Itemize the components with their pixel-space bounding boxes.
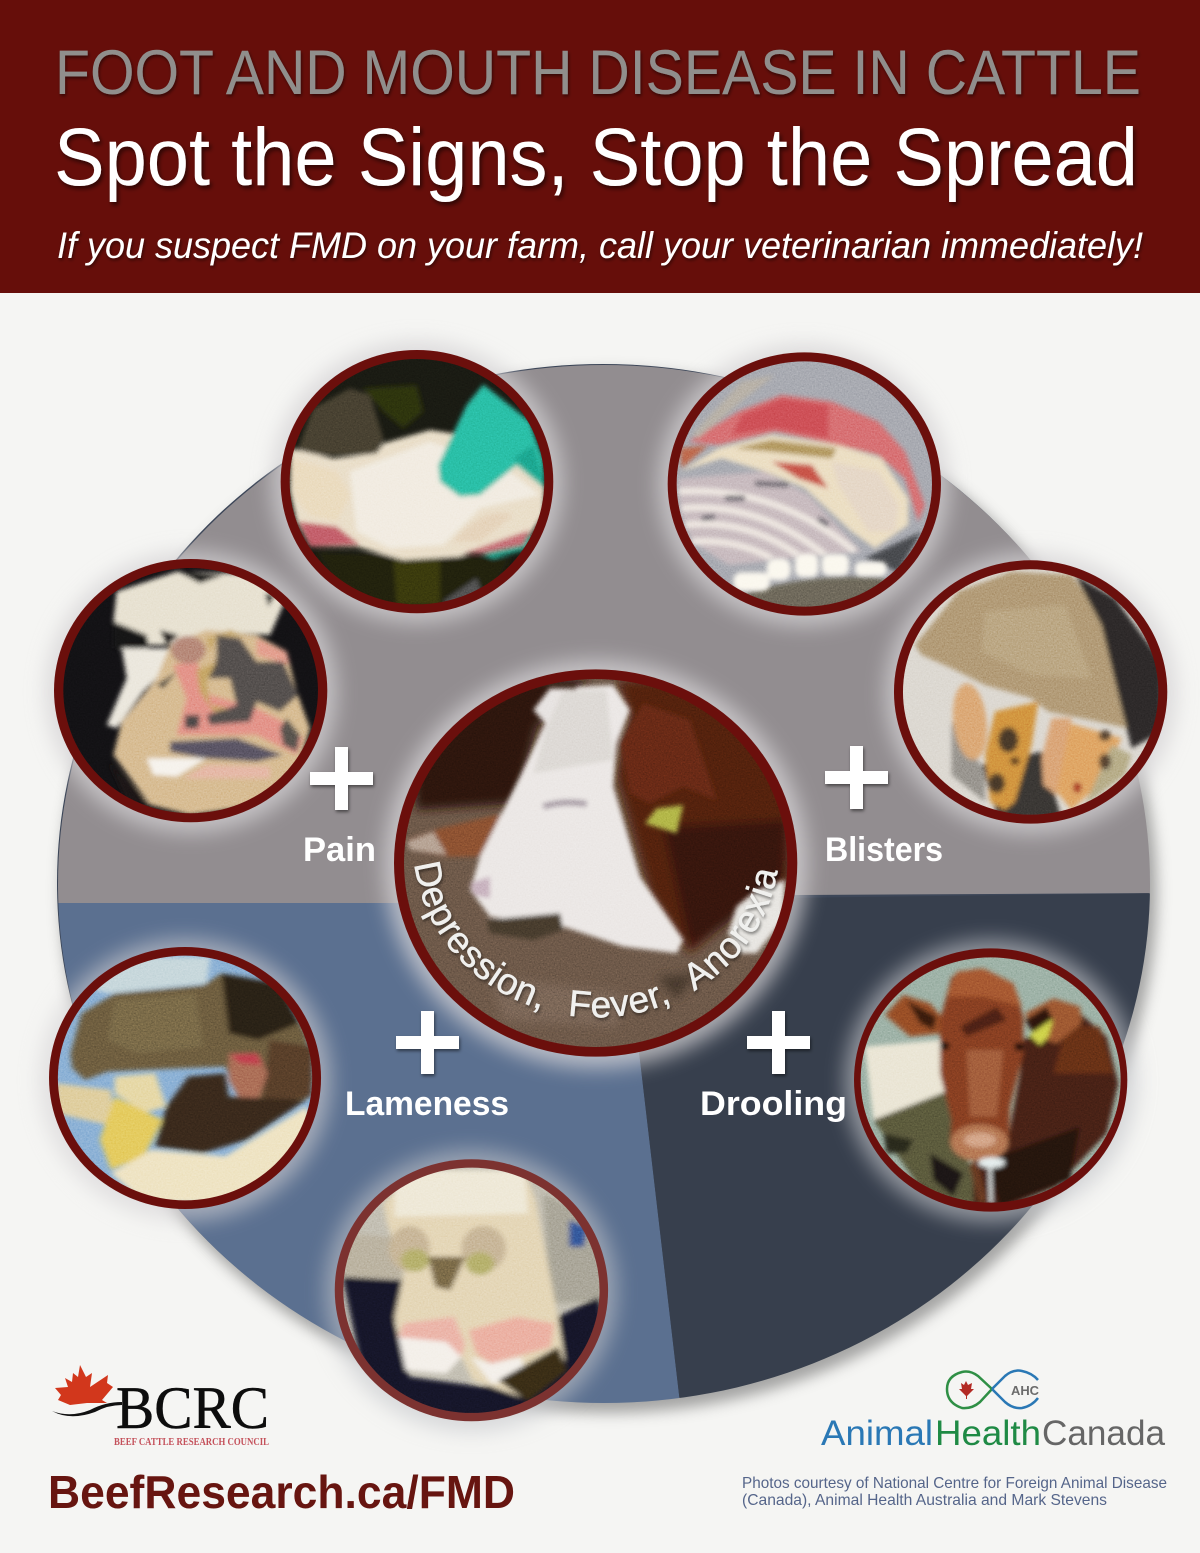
label: blisters: Blisters [825, 831, 943, 869]
disc shadow [61, 371, 1157, 1413]
segmented disc [40, 350, 1170, 1420]
logo: Animal Health Canada: Canada [1042, 1414, 1166, 1453]
label: pain: Pain [303, 831, 376, 869]
icon: plus [747, 1011, 810, 1074]
logo: BCRC [52, 1365, 269, 1448]
photo: hoof with interdigital lesion [39, 939, 331, 1221]
photo: tongue lesion with gloved hand [271, 341, 563, 623]
label: lameness [345, 1011, 509, 1123]
photo: underside of hoof [325, 1150, 617, 1432]
icon: plus [310, 747, 373, 810]
label: drooling: Drooling [700, 1085, 847, 1123]
logo: BCRC: BEEF CATTLE RESEARCH COUNCIL [114, 1437, 269, 1448]
quadrant: drooling [640, 893, 1150, 1398]
icon: plus [396, 1011, 459, 1074]
curved label: general signs: Depression, Fever, Anorexia [414, 862, 780, 1022]
icon: infinity mark [947, 1371, 1038, 1408]
photo credits: Photos courtesy of National Centre for Foreign Animal Disease [742, 1475, 1167, 1492]
photo: drooling cow [845, 940, 1137, 1222]
logo: Animal Health Canada: AHC [1011, 1383, 1040, 1398]
disc outline [57, 364, 1149, 1402]
label: blisters [825, 746, 943, 869]
photo: muzzle lesions [45, 551, 337, 833]
photo: sleeping depressed cow [374, 650, 820, 1080]
label: lameness: Lameness [345, 1085, 509, 1123]
label: pain [303, 747, 376, 869]
header banner [0, 0, 1200, 293]
photo: mouth lesions [658, 344, 950, 626]
subheading: call to action: If you suspect FMD on your farm, call your veterinarian immediately! [57, 225, 1143, 266]
icon: plus [825, 746, 888, 809]
photo credits: (Canada), Animal Health Australia and Mark Stevens [742, 1492, 1107, 1509]
heading: spot the signs: Spot the Signs, Stop the Spread [54, 112, 1138, 203]
photo credits [742, 1475, 1167, 1509]
photo: teats with blisters [885, 552, 1177, 834]
logo: Animal Health Canada [821, 1371, 1166, 1453]
quadrant: lameness [40, 903, 682, 1420]
label: drooling [700, 1011, 847, 1123]
logo: Animal Health Canada: Animal [821, 1414, 933, 1453]
logo: BCRC: BCRC [116, 1375, 269, 1441]
icon: maple leaf [55, 1365, 113, 1405]
website url: BeefResearch.ca/FMD [48, 1466, 515, 1518]
logo: Animal Health Canada: Health [935, 1414, 1041, 1453]
quadrant: pain and blisters [40, 350, 1170, 903]
